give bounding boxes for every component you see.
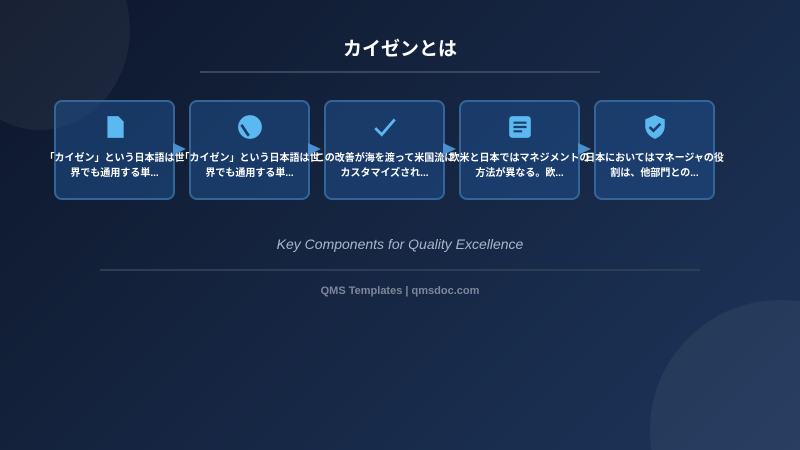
text 5 xyxy=(585,152,724,179)
text 1: 界でも通用する単... xyxy=(70,168,159,179)
card 2 xyxy=(189,100,310,200)
card 1 xyxy=(54,100,175,200)
text 2: 界でも通用する単... xyxy=(205,168,294,179)
text 5: 日本においてはマネージャの役 xyxy=(585,153,724,164)
card 5 xyxy=(594,100,715,200)
icon: check xyxy=(374,118,396,136)
title: カイゼンとは xyxy=(343,39,457,60)
card 3 xyxy=(324,100,445,200)
icon: document xyxy=(107,116,124,138)
text 4 xyxy=(450,152,590,179)
text 4: 方法が異なる。欧... xyxy=(475,168,564,179)
card 4 xyxy=(459,100,580,200)
icon: note xyxy=(509,116,531,138)
icon: leaf circle xyxy=(238,115,262,139)
arrow 4 xyxy=(578,143,591,155)
text 2: 「カイゼン」という日本語は世 xyxy=(180,153,320,164)
footer: QMS Templates | qmsdoc.com xyxy=(321,285,479,297)
text 2 xyxy=(180,152,320,179)
subtitle: Key Components for Quality Excellence xyxy=(277,236,523,252)
arrow 1 xyxy=(173,143,186,155)
text 5: 割は、他部門との... xyxy=(610,168,699,179)
icon: shield check xyxy=(645,115,665,139)
arrow 2 xyxy=(308,143,321,155)
text 3 xyxy=(315,152,454,179)
text 1 xyxy=(44,152,184,179)
text 4: 欧米と日本ではマネジメントの xyxy=(450,153,590,164)
text 1: 「カイゼン」という日本語は世 xyxy=(44,153,184,164)
text 3: この改善が海を渡って米国流に xyxy=(315,153,454,164)
arrow 3 xyxy=(443,143,456,155)
text 3: カスタマイズされ... xyxy=(340,168,429,179)
